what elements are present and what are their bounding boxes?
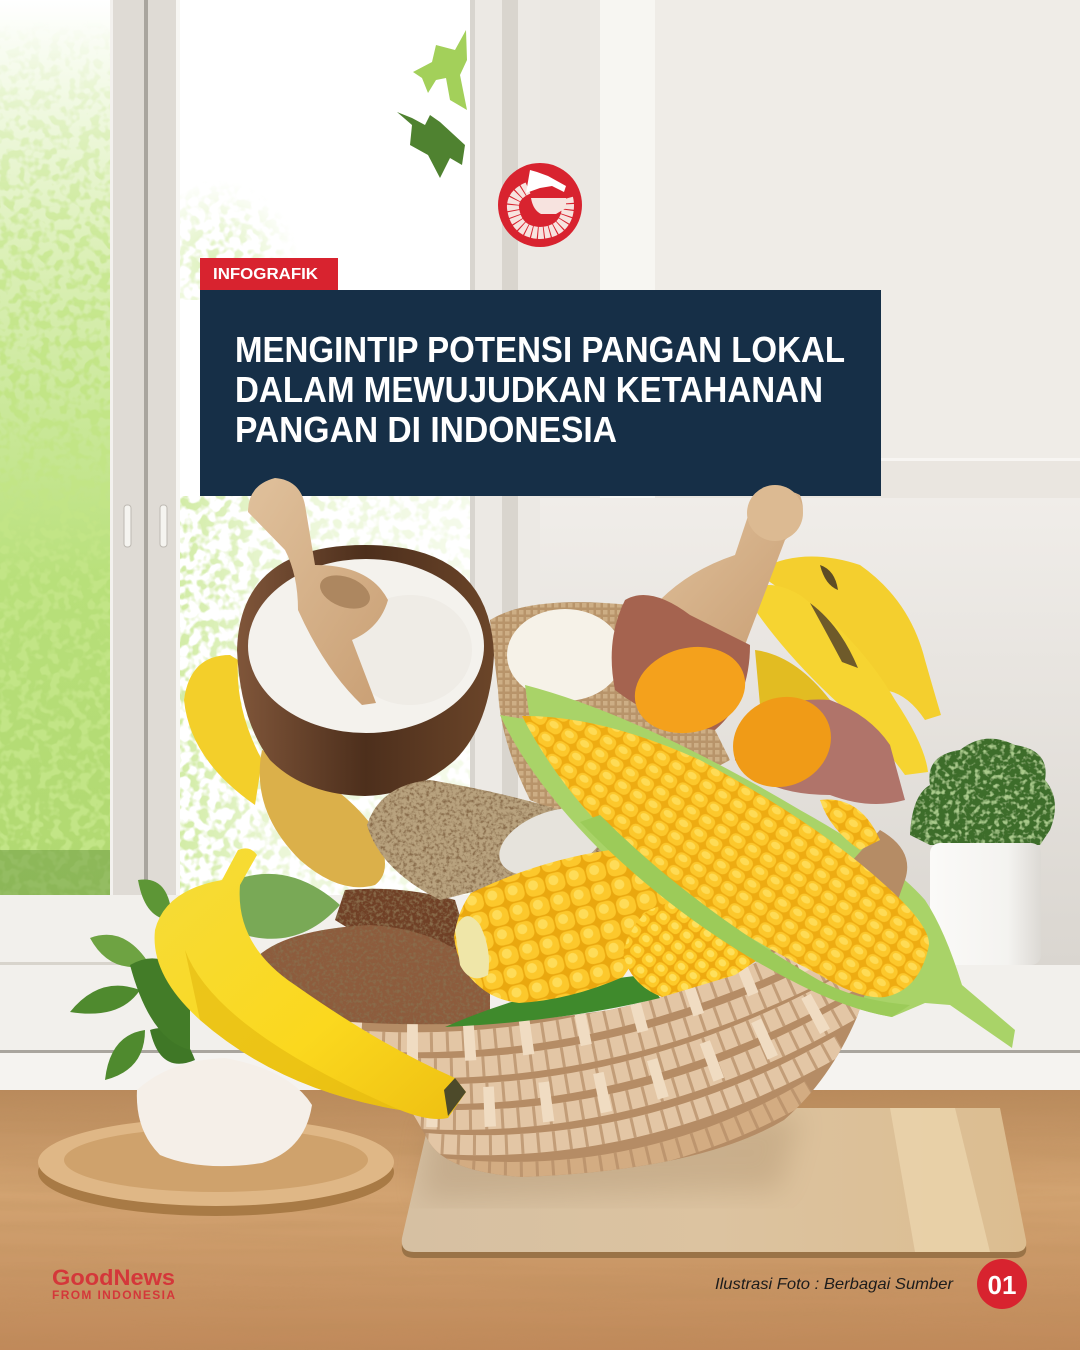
title text (235, 329, 845, 450)
brand logo text (52, 1265, 175, 1302)
white pot (930, 843, 1041, 965)
wooden scoop top right (660, 485, 803, 645)
logo (498, 163, 582, 247)
cassava (367, 780, 614, 900)
brand logo text: FROM INDONESIA (52, 1288, 175, 1302)
inner bar (531, 198, 566, 214)
title text: DALAM MEWUJUDKAN KETAHANAN (235, 369, 823, 410)
corn cobs (454, 716, 929, 1017)
hanging leaves (397, 30, 467, 178)
left potted plant (70, 874, 340, 1166)
category tag: INFOGRAFIK (213, 266, 319, 283)
top right corn (820, 800, 880, 850)
middle corn (623, 900, 762, 997)
plant foliage (910, 739, 1055, 845)
scoop (248, 478, 388, 705)
corn stem end (455, 916, 489, 978)
woven bands (366, 952, 860, 1177)
page number: 01 (988, 1270, 1016, 1300)
window with garden view (0, 0, 540, 967)
cutting board (402, 1108, 1026, 1258)
title text: MENGINTIP POTENSI PANGAN LOKAL (235, 329, 845, 370)
long corn (522, 716, 929, 997)
plant leaves (70, 874, 340, 1080)
sweet potatoes (612, 595, 905, 804)
brand logo text: GoodNews (52, 1265, 175, 1290)
flour bowl (237, 478, 494, 796)
white pot (137, 1058, 312, 1166)
photo credit: Ilustrasi Foto : Berbagai Sumber (715, 1276, 954, 1293)
dragon head (526, 170, 566, 193)
dragon ring (513, 188, 568, 233)
category tag (200, 258, 338, 290)
front banana (155, 848, 466, 1119)
right potted plant (910, 739, 1055, 965)
title text: PANGAN DI INDONESIA (235, 409, 617, 450)
dark cassava roots (250, 889, 490, 1030)
counter and lower cabinets (0, 965, 1080, 1090)
bananas top right (745, 556, 941, 775)
round wooden tray (38, 1118, 394, 1216)
title panel (200, 290, 881, 496)
wall cabinet (655, 0, 1080, 498)
small yellow banana and potato (184, 655, 385, 887)
rice sack (490, 602, 730, 830)
husk edge (580, 815, 910, 1017)
basket (340, 820, 920, 1190)
pale binding strands (351, 963, 830, 1128)
page number (977, 1259, 1027, 1309)
left corn (454, 850, 675, 1003)
wooden table (0, 1090, 1080, 1350)
bowl (237, 545, 494, 796)
banana leaf (445, 975, 660, 1027)
husk behind corn (500, 685, 1015, 1048)
weave ribs (366, 956, 856, 1177)
flour (248, 559, 484, 733)
